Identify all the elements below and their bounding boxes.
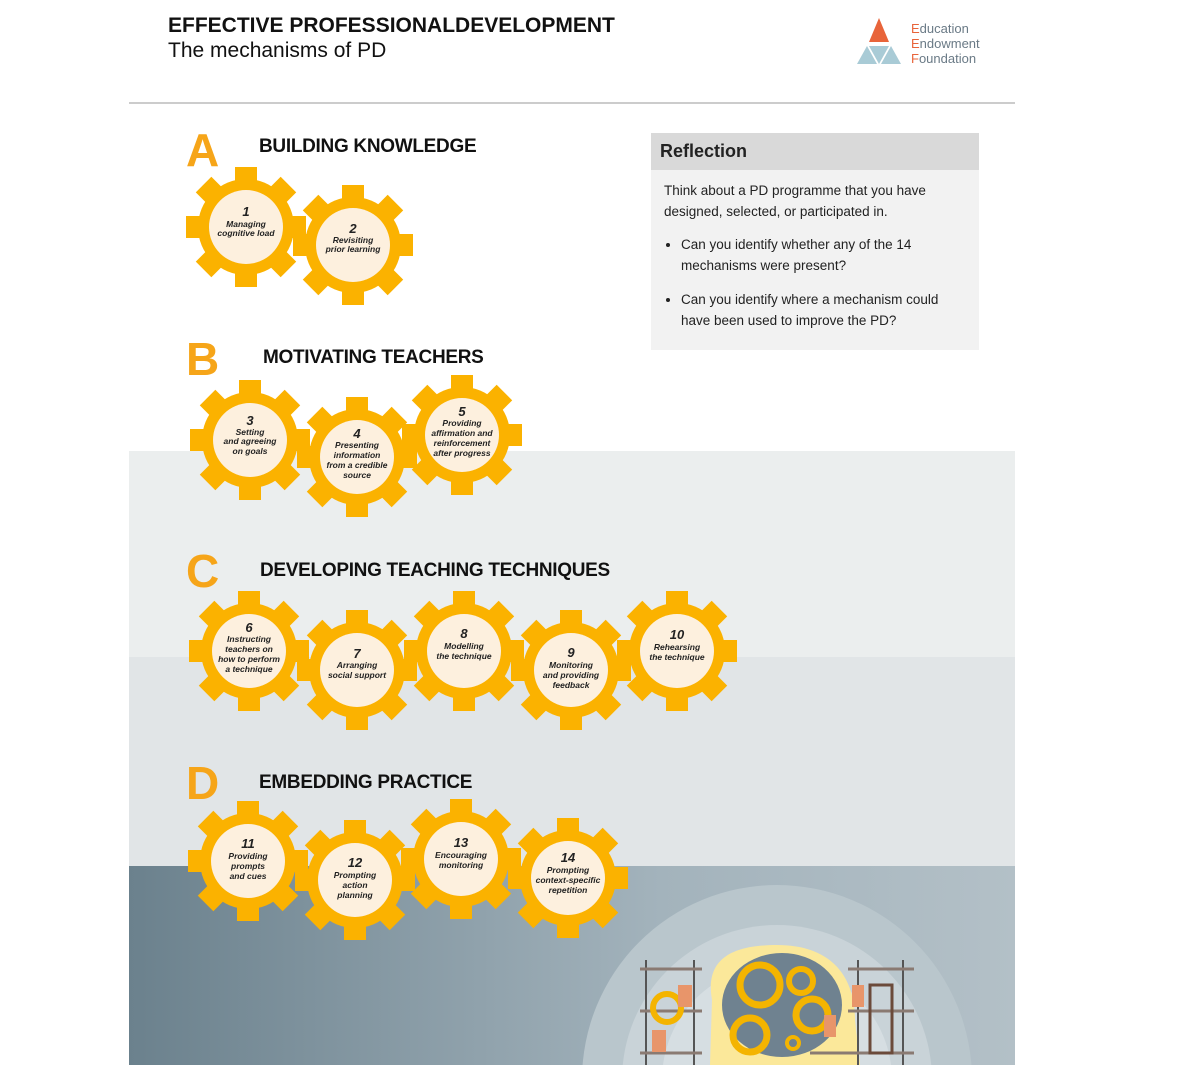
- divider: [129, 102, 1015, 104]
- gear 13: 13: [454, 835, 469, 850]
- text: MOTIVATING TEACHERS: [263, 347, 484, 368]
- title: EFFECTIVE PROFESSIONALDEVELOPMENT: [168, 14, 615, 37]
- logo: Education: [911, 21, 969, 36]
- gear 6: a technique: [225, 664, 273, 674]
- gear 11: and cues: [230, 871, 267, 881]
- gear 11: prompts: [230, 861, 265, 871]
- gear 2: [293, 185, 413, 305]
- gear 2: prior learning: [325, 244, 381, 254]
- illustration: head with gears: [582, 885, 972, 1079]
- gear 10: the technique: [649, 652, 705, 662]
- gear 14: [508, 818, 628, 938]
- gear 11: 11: [241, 836, 255, 851]
- gear 4: information: [334, 450, 380, 460]
- gear 6: how to perform: [218, 654, 280, 664]
- gear 5: after progress: [433, 448, 491, 458]
- gear 2: 2: [348, 221, 357, 236]
- text: BUILDING KNOWLEDGE: [259, 136, 476, 157]
- gear 3: 3: [246, 413, 254, 428]
- gear 12: 12: [348, 855, 363, 870]
- gear 12: action: [342, 880, 368, 890]
- gear 14: repetition: [549, 885, 587, 895]
- gear 12: Prompting: [334, 870, 377, 880]
- gear 11: [188, 801, 308, 921]
- gear 1: 1: [242, 204, 250, 219]
- gear 1: cognitive load: [217, 228, 275, 238]
- text: C: [186, 545, 219, 597]
- gear 9: feedback: [553, 680, 591, 690]
- gear 13: Encouraging: [435, 850, 488, 860]
- gear 2: Revisiting: [333, 235, 374, 245]
- gear 5: Providing: [442, 418, 482, 428]
- gear 10: 10: [670, 627, 685, 642]
- text: B: [186, 333, 219, 385]
- gear 7: [297, 610, 417, 730]
- gear 12: planning: [336, 890, 374, 900]
- reflection panel: [651, 133, 979, 350]
- gear 4: source: [343, 470, 371, 480]
- reflection panel: Can you identify where a mechanism could have been used to improve the PD?: [681, 292, 938, 328]
- gear 13: monitoring: [439, 860, 484, 870]
- logo: Endowment: [911, 36, 980, 51]
- text: D: [186, 757, 219, 809]
- section headings: A: [186, 124, 219, 176]
- gear 13: [401, 799, 521, 919]
- text: DEVELOPING TEACHING TECHNIQUES: [260, 560, 610, 581]
- gear 5: [402, 375, 522, 495]
- gear 9: and providing: [543, 670, 600, 680]
- reflection panel: Think about a PD programme that you have designed, selected, or participated in.: [664, 183, 926, 219]
- gear 6: teachers on: [225, 644, 273, 654]
- gear 8: [404, 591, 524, 711]
- gear 9: 9: [567, 645, 575, 660]
- background bands: [129, 451, 1015, 657]
- gear 8: Modelling: [444, 641, 485, 651]
- gear 5: reinforcement: [434, 438, 492, 448]
- gear 14: context-specific: [536, 875, 601, 885]
- gear 4: Presenting: [335, 440, 380, 450]
- text: EMBEDDING PRACTICE: [259, 772, 472, 793]
- gear 5: 5: [458, 404, 466, 419]
- gear 3: [190, 380, 310, 500]
- gear 1: Managing: [226, 219, 267, 229]
- gear 3: and agreeing: [224, 436, 277, 446]
- gear 10: Rehearsing: [654, 642, 701, 652]
- gear 9: [511, 610, 631, 730]
- gear 4: 4: [352, 426, 361, 441]
- gear 7: 7: [353, 646, 361, 661]
- gear 4: from a credible: [327, 460, 388, 470]
- title: [168, 14, 615, 62]
- gear 6: 6: [245, 620, 253, 635]
- gear 6: [189, 591, 309, 711]
- reflection panel: Reflection: [660, 141, 747, 161]
- logo: Foundation: [911, 51, 976, 66]
- gears: [186, 167, 970, 1065]
- gear 11: Providing: [228, 851, 268, 861]
- gear 5: affirmation and: [431, 428, 493, 438]
- reflection panel: Can you identify whether any of the 14 mechanisms were present?: [681, 237, 911, 273]
- gear 14: 14: [561, 850, 576, 865]
- gear 1: [186, 167, 306, 287]
- gear 8: 8: [460, 626, 468, 641]
- gear 4: [297, 397, 417, 517]
- gear 14: Prompting: [547, 865, 590, 875]
- gear 10: [617, 591, 737, 711]
- logo: [857, 18, 980, 66]
- gear 12: [295, 820, 415, 940]
- title: The mechanisms of PD: [168, 39, 386, 62]
- gear 7: social support: [328, 670, 387, 680]
- gear 9: Monitoring: [549, 660, 594, 670]
- gear 7: Arranging: [336, 660, 378, 670]
- gear 3: on goals: [233, 446, 268, 456]
- gear 6: Instructing: [227, 634, 272, 644]
- gear 8: the technique: [436, 651, 492, 661]
- gear 3: Setting: [236, 427, 265, 437]
